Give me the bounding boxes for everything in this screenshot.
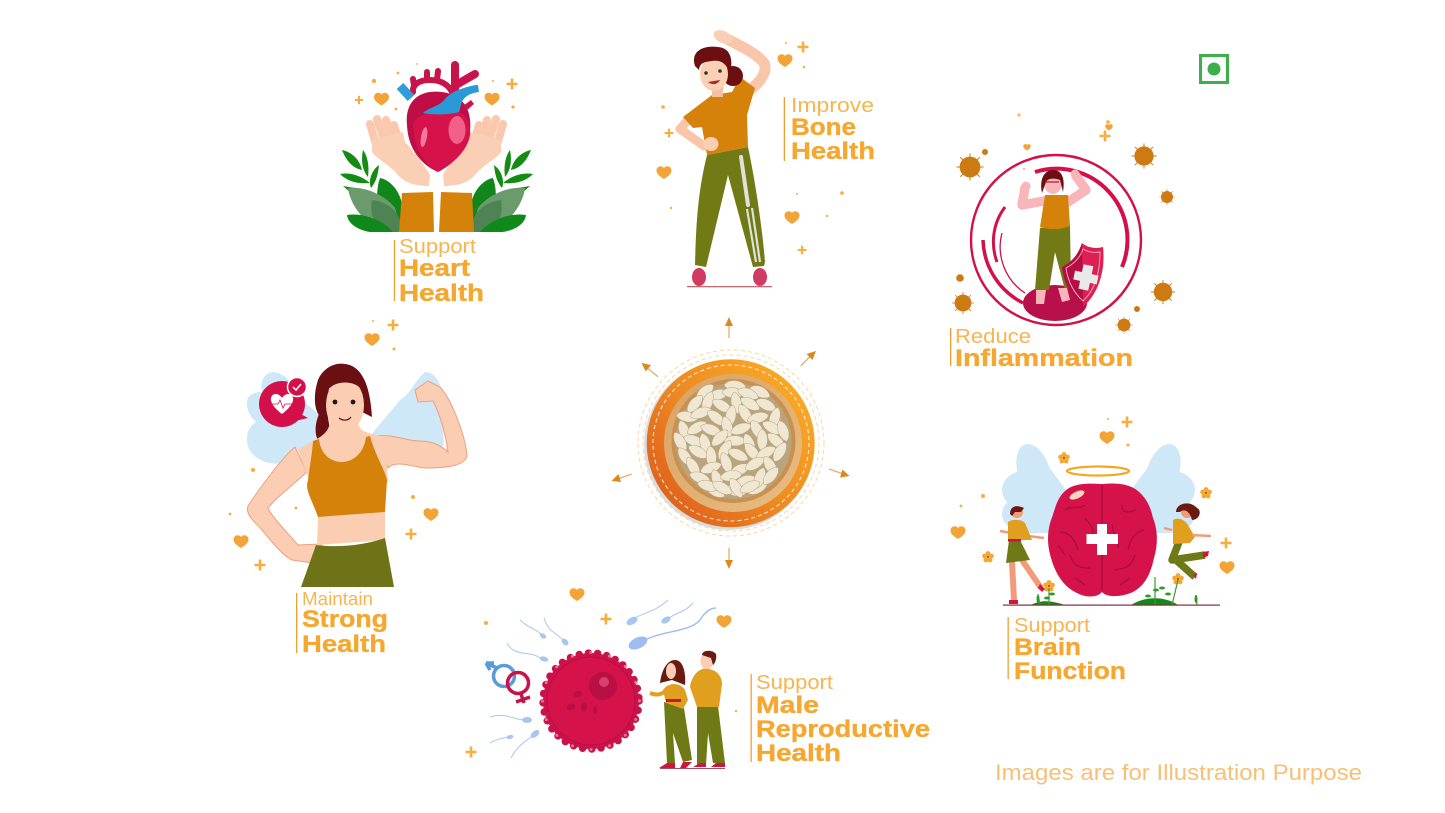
icon: egg cell — [542, 652, 640, 750]
decorative hearts, plus signs and dots — [355, 63, 518, 110]
text: support heart health: Support — [399, 236, 476, 258]
green veg mark — [1200, 56, 1228, 82]
icon: shield with cross — [1062, 243, 1104, 307]
icon: heartbeat speech bubble — [259, 378, 308, 427]
icon: mound — [1023, 285, 1087, 321]
panel: reduce inflammation — [950, 113, 1175, 372]
icon: brain with cross — [1048, 484, 1157, 596]
text: maintain strong health — [296, 589, 388, 658]
decorative hearts, plus signs and dots — [229, 320, 438, 570]
outer dashed rings — [638, 350, 824, 536]
direction arrows — [612, 317, 850, 569]
text: support heart health: Health — [399, 280, 484, 307]
icon: left wing — [1002, 439, 1066, 533]
icon: protective ring — [971, 155, 1141, 325]
decorative hearts, plus signs and dots — [656, 42, 844, 254]
icon: left sleeve — [399, 192, 434, 232]
text: support male reproductive health: Reproductive — [756, 716, 930, 743]
panel: maintain strong health — [229, 320, 467, 658]
text: support heart health — [394, 236, 484, 307]
panel: central bowl of sunflower seeds — [612, 317, 850, 569]
panel: improve bone health — [656, 27, 875, 287]
text: reduce inflammation: Reduce — [955, 326, 1031, 348]
seeds — [670, 380, 792, 501]
footnote: Images are for Illustration Purpose — [995, 760, 1362, 785]
icon: right wing — [1131, 439, 1195, 533]
decorative hearts, plus signs, dots and flowers — [950, 416, 1234, 591]
text: support brain function: Function — [1014, 658, 1126, 685]
text: improve bone health: Improve — [791, 95, 874, 117]
text: improve bone health: Health — [791, 138, 875, 165]
text: support male reproductive health: Support — [756, 672, 833, 694]
icon: right hand — [443, 119, 503, 186]
icon: right wing — [370, 372, 444, 466]
decorative hearts and plus signs — [1017, 113, 1113, 170]
icon: left dancing girl — [1000, 506, 1045, 604]
text: reduce inflammation — [950, 326, 1133, 372]
icon: couple — [650, 651, 725, 769]
icon: halo — [1067, 466, 1129, 476]
panel: support male reproductive health — [466, 588, 930, 769]
icon: plants — [340, 150, 402, 232]
icon: sperm cells — [490, 600, 716, 758]
panel: support brain function — [950, 416, 1234, 685]
icon: anatomical heart — [400, 65, 479, 172]
icon: gender symbols — [486, 663, 530, 703]
icon: plants — [1031, 577, 1198, 605]
ground line — [1003, 604, 1220, 606]
text: maintain strong health: Strong — [302, 606, 388, 633]
icon: left hand — [370, 119, 430, 186]
bowl — [664, 374, 802, 512]
text: support brain function: Support — [1014, 615, 1090, 637]
text: support heart health: Heart — [399, 255, 470, 282]
text: support male reproductive health — [750, 672, 930, 767]
text: reduce inflammation: Inflammation — [955, 345, 1133, 372]
plate — [644, 359, 815, 530]
text: maintain strong health: Maintain — [302, 589, 373, 609]
icon: viruses — [952, 143, 1175, 333]
text: maintain strong health: Health — [302, 631, 386, 658]
text: support brain function: Brain — [1014, 634, 1081, 661]
decorative hearts, plus signs and dots — [466, 588, 737, 758]
panel: support heart health — [340, 63, 533, 307]
icon: woman stretching — [680, 27, 772, 287]
text: support male reproductive health: Health — [756, 740, 841, 767]
icon: left wing — [247, 372, 320, 463]
icon: mirrored plants — [471, 150, 533, 232]
icon: muscular woman — [247, 364, 467, 587]
icon: woman flexing — [1022, 170, 1086, 304]
icon: right sleeve — [439, 192, 474, 232]
text: support male reproductive health: Male — [756, 692, 819, 719]
text: improve bone health: Bone — [791, 114, 856, 141]
text: improve bone health — [784, 95, 875, 165]
icon: right jumping girl — [1164, 503, 1211, 579]
text: support brain function — [1008, 615, 1126, 685]
